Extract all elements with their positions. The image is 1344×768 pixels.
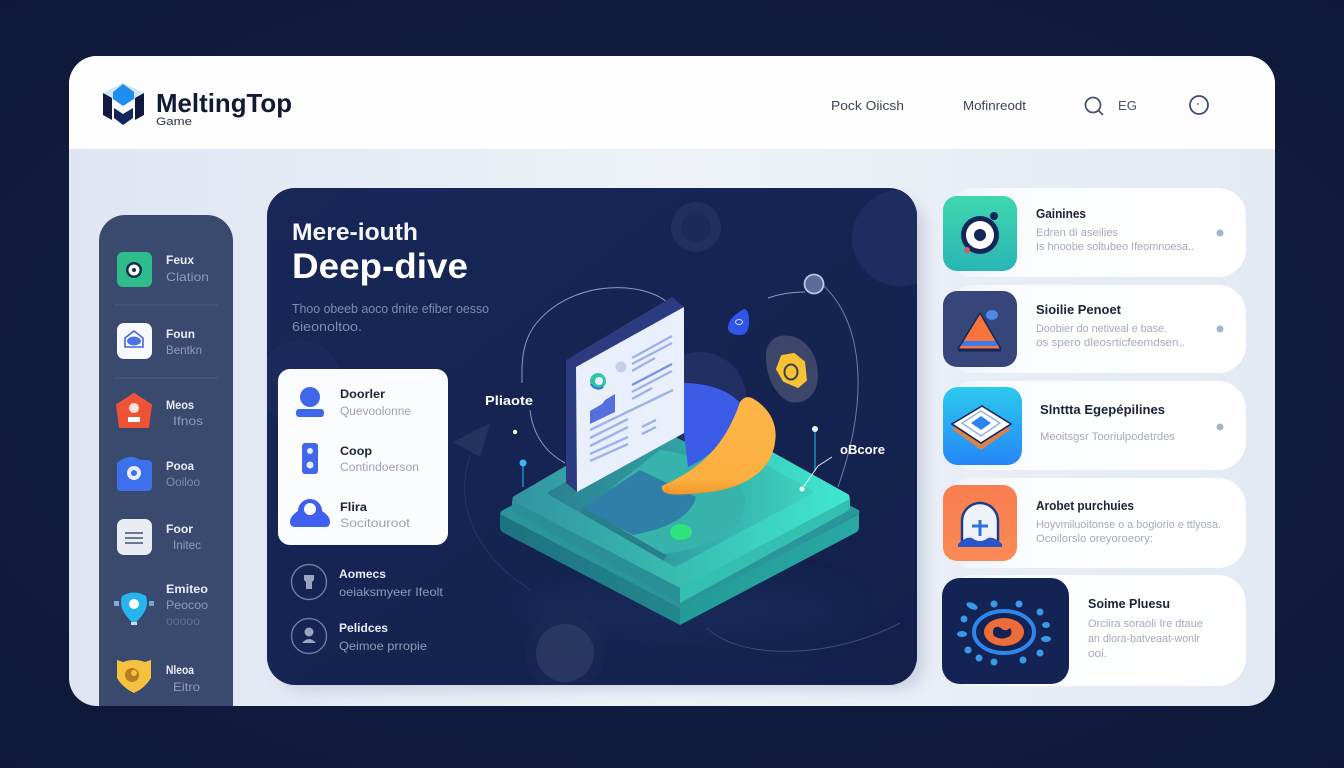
orange crescent	[662, 397, 776, 495]
card 4: Hoyvmiluoitonse o a bogiorio e ttlyosa.	[1036, 519, 1221, 531]
card 5: ooi.	[1088, 648, 1107, 660]
document lines	[590, 336, 673, 461]
document panel	[566, 297, 684, 492]
feature 1: Quevoolonne	[340, 406, 411, 418]
node circle	[804, 274, 824, 294]
sidebar item 7	[117, 660, 200, 694]
isometric platform	[500, 404, 859, 645]
card 4: Arobet purchuies	[1036, 499, 1134, 513]
brand name: MeltingTop	[156, 88, 292, 118]
floating yellow badge	[766, 335, 818, 403]
blue disc	[582, 470, 696, 535]
list item: Pelidces: Qeimoe prropie	[339, 639, 427, 653]
feature 1	[296, 387, 411, 418]
platform top surface	[516, 404, 846, 584]
sidebar item 2: Foun	[166, 329, 195, 341]
card 4	[943, 478, 1246, 568]
green status dot	[670, 524, 692, 540]
sidebar item 4	[117, 457, 200, 491]
icon: profile circle	[1190, 96, 1208, 114]
sidebar item 7: Eitro	[173, 680, 200, 694]
card 3: Meoitsgsr Tooriulpodetrdes	[1040, 431, 1176, 443]
hero panel: deep dive	[258, 188, 948, 693]
sidebar item 1	[117, 252, 209, 287]
intro text	[292, 302, 489, 334]
sidebar item 5: Foor	[166, 524, 194, 536]
icon: eye with rays	[942, 578, 1069, 684]
card 5: Orciira soraoli Ire dtaue	[1088, 618, 1203, 630]
floating blue drop	[728, 309, 749, 335]
feature 2	[302, 443, 419, 474]
card 2: Sioilie Penoet	[1036, 303, 1122, 317]
feature 3	[290, 499, 411, 530]
list item: Pelidces: Pelidces	[339, 623, 388, 635]
sidebar item 5: Initec	[173, 538, 201, 552]
logo mark	[103, 83, 144, 125]
list item: Pelidces	[292, 618, 427, 654]
sidebar item 6	[114, 584, 208, 628]
hero panel shadow	[275, 200, 925, 690]
main window card	[69, 56, 1275, 706]
nav link 2: Mofinreodt	[963, 98, 1026, 113]
icon: search	[1086, 98, 1103, 115]
feature 2: Contindoerson	[340, 462, 419, 474]
brand subtitle: Game	[156, 116, 192, 128]
list item: Aomecs: Aomecs	[339, 569, 386, 581]
sidebar item 1: Feux	[166, 255, 195, 267]
card 2	[943, 285, 1246, 373]
title: Mere-iouth	[292, 219, 418, 246]
sidebar item 2: Bentkn	[166, 343, 202, 357]
intro text: Thoo obeeb aoco dnite efiber oesso	[292, 302, 489, 316]
callout label left: Pliaote	[485, 394, 533, 408]
blue pie	[684, 383, 740, 467]
icon: isometric tile	[943, 387, 1022, 465]
sidebar item 1: Clation	[166, 270, 209, 284]
callout label right: oBcore	[840, 443, 885, 457]
list item: Aomecs: oeiaksmyeer Ifeolt	[339, 585, 444, 599]
icon: target	[943, 196, 1017, 271]
language label: EG	[1118, 98, 1137, 113]
card 3: Slnttta Egepépilines	[1040, 403, 1165, 417]
white feature card	[278, 369, 448, 545]
sidebar panel	[99, 215, 233, 706]
list item: Aomecs	[292, 564, 444, 600]
sidebar item 6: ooooo	[166, 614, 200, 628]
sidebar item 2	[117, 323, 202, 359]
decorative faint discs	[454, 190, 917, 682]
nav link 1: Pock Oiicsh	[831, 98, 904, 113]
feature 2: Coop	[340, 444, 372, 458]
sidebar item 6: Emiteo	[166, 584, 208, 596]
teal disc	[590, 450, 745, 555]
infographic canvas	[69, 56, 1275, 706]
card 1: Is hnoobe soltubeo Ifeomnoesa..	[1036, 241, 1194, 253]
card 3	[943, 381, 1246, 470]
icon: shield cross	[943, 485, 1017, 561]
title: Deep-dive	[292, 247, 468, 286]
halo behind pie	[654, 352, 746, 444]
card 1: Edren di aseilies	[1036, 227, 1119, 239]
green ring	[590, 373, 606, 389]
feature 3: Flira	[340, 500, 367, 514]
lower layer	[503, 418, 857, 606]
title	[292, 219, 468, 286]
intro text: 6ieonoltoo.	[292, 320, 362, 334]
upper layer sides	[512, 500, 680, 603]
feature 3: Socitouroot	[340, 518, 411, 530]
icon: cone	[943, 291, 1017, 367]
right column cards	[942, 188, 1246, 686]
card 2: os spero dleosrticfeemdsen..	[1036, 337, 1185, 349]
sidebar item 3: Ifnos	[173, 414, 203, 428]
sidebar item 3: Meos	[166, 400, 194, 412]
feature 1: Doorler	[340, 387, 385, 401]
inner tray	[550, 420, 811, 565]
card 5: an dlora-batveaat-wonlr	[1088, 633, 1200, 645]
folder glyph	[590, 394, 615, 424]
tray strip	[582, 510, 665, 558]
pin markers	[513, 426, 832, 492]
sidebar item 4: Pooa	[166, 461, 195, 473]
sidebar item 6: Peocoo	[166, 598, 208, 612]
sidebar item 3	[117, 394, 203, 428]
orbit lines	[522, 285, 900, 651]
card 2: Doobier do netiveal e base.	[1036, 323, 1167, 335]
card 5: Soime Pluesu	[1088, 597, 1170, 611]
card 1: Gainines	[1036, 207, 1086, 221]
card 4: Ocoilorslo oreyoroeory:	[1036, 533, 1153, 545]
sidebar item 4: Ooiloo	[166, 475, 200, 489]
header bar	[69, 56, 1275, 149]
sidebar item 5	[117, 519, 201, 555]
card 1	[943, 188, 1246, 277]
card 5	[942, 575, 1246, 686]
sidebar item 7: Nleoa	[166, 665, 195, 677]
